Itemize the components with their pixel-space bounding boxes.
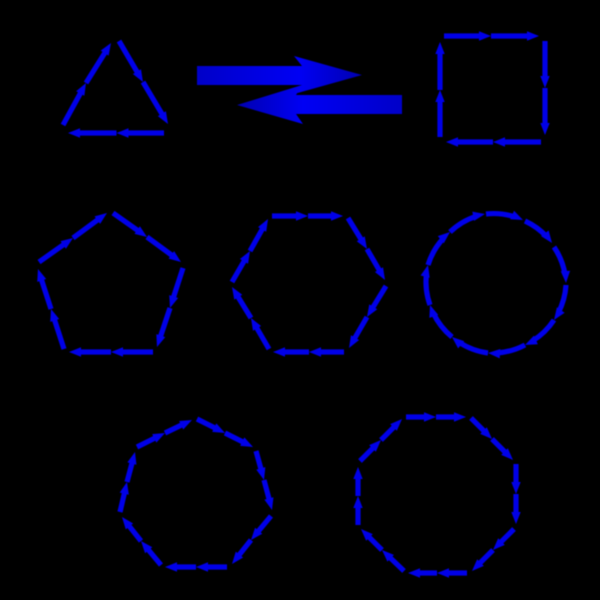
arrow: pointing left — [237, 85, 402, 124]
hexagon of arrows — [232, 216, 386, 352]
octagon of arrows — [358, 417, 516, 573]
heptagon of arrows — [120, 419, 272, 567]
circle of arrows — [426, 214, 566, 353]
all shapes — [38, 36, 566, 573]
pentagon of arrows — [38, 213, 183, 352]
double arrows: exchange symbol — [197, 56, 402, 124]
arrow: pointing right — [197, 56, 362, 94]
triangle of arrows — [63, 41, 168, 133]
square of arrows — [440, 36, 545, 142]
